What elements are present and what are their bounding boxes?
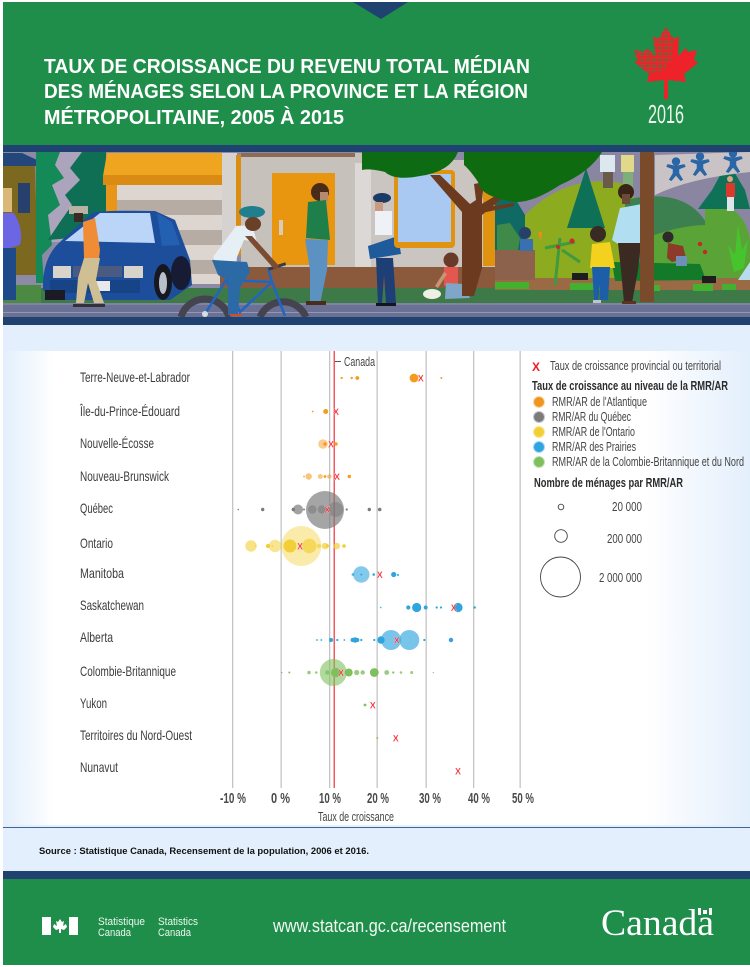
navy band above footer (3, 871, 750, 879)
navy band below scene (3, 317, 750, 325)
source note: Source : Statistique Canada, Recensement de la population, 2006 et 2016. (39, 846, 369, 857)
province labels: Yukon (80, 695, 107, 711)
illustration: neighbourhood street scene (3, 149, 750, 317)
icon: census maple leaf (634, 27, 698, 99)
legend: bubble sizes: Nombre de ménages par RMR/AR (534, 475, 683, 490)
provincial growth rate markers: X (393, 734, 399, 744)
ground and sidewalk (3, 278, 750, 317)
province labels: Territoires du Nord-Ouest (80, 727, 192, 743)
legend: bubble sizes: 20 000 (612, 499, 642, 514)
provincial growth rate markers: X (394, 636, 400, 646)
pale blue background (3, 325, 750, 871)
x axis labels: 0 % (271, 790, 290, 807)
legend: CMA colours (532, 378, 744, 469)
footer band (3, 879, 750, 965)
title: DES MÉNAGES SELON LA PROVINCE ET LA RÉGION (44, 80, 528, 103)
province labels: Île-du-Prince-Édouard (79, 403, 180, 419)
provincial growth rate markers (297, 374, 461, 776)
website: www.statcan.gc.ca/recensement (272, 916, 506, 936)
garden hills (495, 152, 750, 278)
provincial growth rate markers: X (451, 603, 457, 613)
pine trees (36, 152, 106, 283)
bubbles: Prairies (316, 566, 476, 650)
year: 2016 (648, 99, 684, 129)
gardener and plants (572, 224, 750, 283)
legend: CMA colours: RMR/AR des Prairies (552, 439, 636, 454)
Statistics Canada signature text: Statistics (158, 916, 198, 928)
chart gridlines (232, 351, 521, 788)
icon: Canadian flag signature (42, 917, 78, 935)
province labels: Alberta (80, 629, 113, 645)
x axis labels (220, 790, 534, 807)
x axis labels: 20 % (367, 790, 389, 807)
provincial growth rate markers: X (328, 440, 334, 450)
provincial growth rate markers: X (370, 700, 376, 710)
legend: CMA colours: RMR/AR de l'Atlantique (552, 394, 647, 409)
planter with child and carrot (495, 223, 542, 280)
x axis labels: 50 % (512, 790, 534, 807)
provincial growth rate markers: X (333, 407, 339, 417)
woman at left edge (3, 188, 21, 300)
province labels: Québec (80, 500, 113, 516)
provincial growth rate markers: X (324, 505, 330, 515)
legend: bubble sizes: 200 000 (607, 531, 642, 546)
legend: CMA colours: RMR/AR de l'Ontario (552, 424, 635, 439)
orange awning and striped wall (103, 153, 222, 284)
province labels (79, 369, 192, 775)
blue car (43, 211, 192, 300)
notch triangle (353, 2, 408, 19)
provincial growth rate markers: X (338, 668, 344, 678)
province labels: Saskatchewan (80, 597, 144, 613)
legend: CMA colours: RMR/AR du Québec (552, 409, 631, 424)
province labels: Ontario (80, 535, 113, 551)
province labels: Nouveau-Brunswick (80, 468, 170, 484)
Canada reference line: Canada (344, 354, 376, 369)
Statistics Canada signature text (98, 916, 198, 939)
provincial growth rate markers: X (334, 472, 340, 482)
Canada wordmark: Canada (601, 903, 714, 944)
child with rabbit (423, 252, 470, 299)
x axis labels: 30 % (419, 790, 441, 807)
provincial growth rate markers: X (297, 542, 303, 552)
person on skateboard (69, 206, 105, 307)
mail carrier (368, 193, 401, 306)
legend: bubble sizes (534, 475, 683, 597)
wooden post (640, 152, 654, 302)
bubbles: Quebec (238, 491, 382, 529)
x axis labels: -10 % (220, 790, 246, 807)
province labels: Terre-Neuve-et-Labrador (80, 369, 190, 385)
province labels: Nunavut (80, 759, 118, 775)
panel: chart area (3, 351, 750, 825)
province labels: Manitoba (80, 565, 124, 581)
tree with canopy (362, 152, 602, 296)
provincial growth rate markers: X (418, 374, 424, 384)
x axis labels: 40 % (468, 790, 490, 807)
provincial growth rate markers: X (377, 570, 383, 580)
bubbles: Atlantic (303, 374, 442, 480)
title: TAUX DE CROISSANCE DU REVENU TOTAL MÉDIAN (44, 55, 530, 78)
x axis labels: 10 % (319, 790, 341, 807)
man in green shirt (305, 183, 330, 305)
title: MÉTROPOLITAINE, 2005 À 2015 (44, 106, 344, 129)
tomato plants (545, 238, 706, 285)
legend (532, 358, 744, 597)
province labels: Colombie-Britannique (80, 663, 176, 679)
orange pillar (483, 190, 495, 266)
divider line (3, 827, 750, 828)
legend: provincial marker: X (532, 360, 540, 374)
x axis title: Taux de croissance (318, 809, 394, 824)
bubbles: British Columbia and North (281, 659, 434, 739)
title (44, 55, 530, 129)
cyclist (181, 206, 306, 317)
house front with door (220, 153, 495, 289)
legend: bubble sizes: 2 000 000 (599, 570, 642, 585)
province labels: Nouvelle-Écosse (80, 435, 154, 451)
header band (3, 2, 750, 145)
child in yellow (590, 226, 615, 303)
provincial growth rate markers: X (455, 766, 461, 776)
Statistics Canada signature text: Canada (158, 927, 192, 939)
Statistics Canada signature text: Statistique (98, 916, 145, 928)
man with light blue shirt (612, 184, 640, 304)
bubbles: Ontario (245, 526, 346, 566)
navy band above scene (3, 145, 750, 152)
Statistics Canada signature text: Canada (98, 927, 132, 939)
window (394, 170, 455, 248)
house at left (3, 153, 36, 275)
